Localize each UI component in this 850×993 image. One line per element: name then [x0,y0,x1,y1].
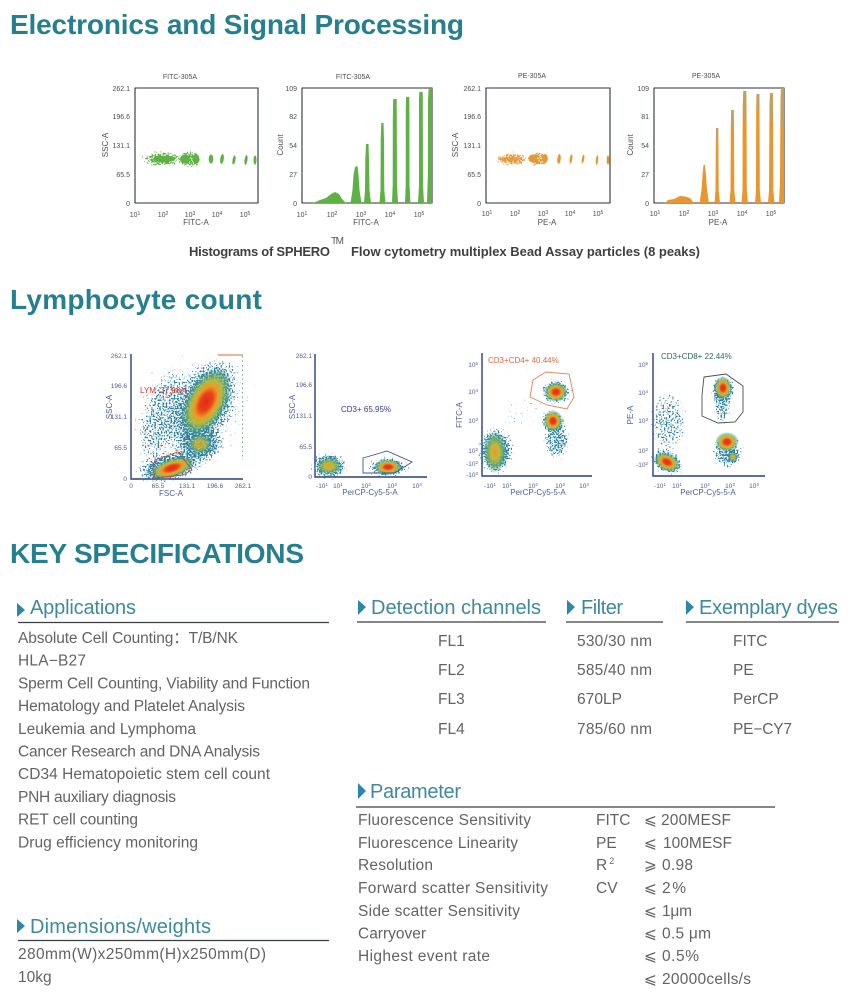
chart: CD3+CD8+ density plot: 1 [679,482,682,487]
chart: CD3+CD8+ density plot: 2 [707,482,710,487]
chart: CD3+CD4+ density plot: 2 [535,482,538,487]
chart: PE count histogram: 10 [679,211,687,218]
chart: PE count histogram: PE-305A [692,73,720,80]
chart: FITC count histogram: 1 [305,211,308,217]
panel: parameter: FITC [596,812,630,829]
chart: CD3+CD4+ density plot: 10 [502,483,509,490]
chart: FSC SSC density plot with LYM gate: 0 [129,483,133,490]
chart: FITC SSC scatter: 196.6 [112,114,130,121]
panel: parameter: 20000cells/s [662,971,751,988]
chart: CD3+CD4+ density plot: 4 [475,388,478,393]
panel: parameter: 0.5 μm [662,926,711,942]
panel: parameter: 200MESF [661,812,731,829]
chart: CD3+CD8+ density plot: -10 [654,483,663,490]
chart: PE SSC scatter: 196.6 [463,114,481,121]
chart: PE count histogram: 5 [774,210,777,216]
panel: parameter: ⩽ [644,948,657,965]
chart: CD3 density plot [288,353,427,497]
chart: PE count histogram: 4 [745,210,748,216]
chart: CD3+CD4+ density plot: 3 [475,417,478,422]
panel: detection channels: FL1 [438,633,465,650]
chart: PE SSC scatter [451,73,610,227]
chart: PE count histogram: Count [626,134,635,156]
chart: PE SSC scatter: 65.5 [467,172,481,179]
panel: exemplary dyes: PerCP [733,691,779,708]
chart: CD3+CD4+ density plot: FITC-A [455,401,464,428]
chart: CD3+CD8+ density plot: PerCP-Cy5-5-A [680,488,736,497]
chart: FSC SSC density plot with LYM gate: 131.1 [111,414,127,421]
caption: histograms: Flow cytometry multiplex Bead Assay particles (8 peaks) [351,244,700,259]
panel: exemplary dyes: Exemplary dyes [699,597,838,619]
panel: parameter: Resolution [358,857,433,874]
panel: dimensions and weights: Dimensions/weights [30,916,211,938]
title: electronics and signal processing: Electronics and Signal Processing [10,9,464,40]
chart: CD3 density plot: 10 [387,483,394,490]
panel: parameter: Carryover [358,926,426,942]
chart: FITC SSC scatter: 3 [193,211,196,217]
chart: FSC SSC density plot with LYM gate: 0 [123,476,127,483]
chart: FITC count histogram: 54 [289,143,297,150]
panel: exemplary dyes: PE−CY7 [733,721,792,738]
chart: PE count histogram: 0 [645,201,649,208]
chart: CD3 density plot: 196.6 [296,382,312,389]
caption: histograms [189,236,700,259]
chart: PE SSC scatter: 2 [518,210,521,216]
chart: FITC count histogram: 82 [289,114,297,121]
panel: parameter [356,781,775,988]
chart: FSC SSC density plot with LYM gate: 262.1 [235,483,252,490]
panel: detection channels: Detection channels [371,597,541,619]
chart: FITC SSC scatter: 5 [248,211,251,217]
chart: FITC SSC scatter: 131.1 [112,143,130,150]
chart: FITC count histogram: 10 [297,212,305,219]
panel: parameter: 2 [609,856,614,866]
panel: applications: Leukemia and Lymphoma [18,721,196,738]
chart: CD3+CD4+ density plot: 10 [528,483,535,490]
chart: CD3+CD4+ density plot: CD3+CD4+ 40.44% [488,356,559,365]
panel: parameter: ⩾ [644,857,657,874]
chart: FITC SSC scatter: 10 [240,212,248,219]
chart: CD3+CD8+ density plot: 4 [645,389,648,394]
chart: CD3+CD8+ density plot: -10 [636,462,645,469]
chart: PE SSC scatter: 10 [482,211,490,218]
chart: PE SSC scatter: 10 [538,211,546,218]
chart: FSC SSC density plot with LYM gate: 196.6 [111,383,127,390]
caption: histograms: TM [331,236,344,247]
panel: parameter: R [596,857,607,874]
panel: parameter: Fluorescence Sensitivity [358,812,531,829]
chart: CD3+CD8+ density plot: 10 [638,390,645,397]
chart: CD3+CD4+ density plot: 10 [468,418,475,425]
chart: FITC SSC scatter: 10 [130,212,138,219]
panel: filter [566,597,663,738]
panel: applications: HLA−B27 [18,653,86,670]
panel: parameter: 100MESF [663,835,732,852]
chart: CD3+CD8+ density plot: 5 [645,361,648,366]
panel: filter: 585/40 nm [577,662,652,679]
chart: CD3+CD8+ density plot: 10 [700,483,707,490]
chart: FITC SSC scatter: 65.5 [116,172,130,179]
panel: applications: Hematology and Platelet Analysis [18,698,245,715]
chart: FITC SSC scatter: 0 [126,201,130,208]
chart: CD3+CD8+ density plot: 10 [638,362,645,369]
panel: detection channels: FL2 [438,662,465,679]
panel: parameter: Parameter [370,781,461,803]
chart: CD3+CD8+ density plot: 10 [672,483,679,490]
panel: applications: Cancer Research and DNA Analysis [18,744,260,760]
chart: CD3 density plot: 0 [308,474,312,481]
panel: filter: 530/30 nm [577,633,652,650]
chart: CD3+CD4+ density plot: -10 [466,461,475,468]
chart: PE SSC scatter: PE-A [538,218,557,227]
chart: PE SSC scatter: SSC-A [451,132,460,157]
chart: PE count histogram: PE-A [709,218,728,227]
panel: parameter: 0.5% [662,948,699,965]
panel: parameter: 2% [662,880,686,897]
chart: PE count histogram: 81 [641,114,649,121]
chart: FSC SSC density plot with LYM gate: 131.1 [179,483,196,490]
panel: applications: Absolute Cell Counting：T/B/NK [18,630,239,647]
chart: PE SSC scatter: 10 [565,211,573,218]
chart: FITC SSC scatter: SSC-A [101,132,110,157]
chart: FSC SSC density plot with LYM gate: 196.6 [207,483,224,490]
chart: FITC SSC scatter: FITC-A [183,218,210,227]
chart: CD3+CD4+ density plot: 10 [468,362,475,369]
chart: FITC count histogram [276,74,432,227]
chart: FITC SSC scatter: 1 [138,211,141,217]
panel: detection channels: FL4 [438,721,465,738]
panel: dimensions and weights: 10kg [18,969,52,986]
chart: FITC count histogram: 27 [289,172,297,179]
panel: filter: Filter [581,597,623,619]
panel: dimensions and weights: 280mm(W)x250mm(H)x250mm(D) [18,946,266,963]
chart: CD3+CD8+ density plot: 10 [749,483,756,490]
chart: FSC SSC density plot with LYM gate: FSC-A [159,489,184,498]
chart: PE count histogram: 3 [716,210,719,216]
title: key specifications: KEY SPECIFICATIONS [10,538,304,569]
chart: CD3+CD8+ density plot: PE-A [626,405,635,424]
chart: FITC SSC scatter: 262.1 [112,86,130,93]
chart: FSC SSC density plot with LYM gate: LYM .37.98% [140,386,187,395]
panel: filter: 785/60 nm [577,721,652,738]
chart: CD3 density plot: SSC-A [288,394,297,419]
chart: FSC SSC density plot with LYM gate: SSC-A [105,394,114,419]
chart: PE SSC scatter: 3 [546,210,549,216]
chart: FITC count histogram: 5 [422,211,425,217]
chart: FITC count histogram: 4 [393,211,396,217]
chart: CD3 density plot: 1 [340,482,343,487]
chart: CD3 density plot: -10 [316,483,325,490]
panel: parameter: Forward scatter Sensitivity [358,880,548,897]
panel: applications: PNH auxiliary diagnosis [18,789,176,806]
chart: CD3+CD4+ density plot: 2 [475,447,478,452]
chart: FITC SSC scatter: 10 [158,212,166,219]
chart: FITC count histogram: Count [276,134,285,156]
chart: PE SSC scatter: 4 [573,210,576,216]
chart: PE count histogram: 1 [658,210,661,216]
chart: PE count histogram: 54 [641,143,649,150]
chart: PE SSC scatter: 0 [477,201,481,208]
chart: CD3+CD4+ density plot: 3 [475,471,478,476]
chart: CD3+CD4+ density plot: 10 [555,483,562,490]
chart: CD3 density plot: 1 [325,482,328,487]
panel: parameter: Highest event rate [358,948,490,965]
chart: FITC SSC scatter: 4 [220,211,223,217]
chart: CD3+CD8+ density plot: 3 [732,482,735,487]
chart: CD3 density plot: 3 [394,482,397,487]
panel: dimensions and weights [17,916,329,986]
chart: FITC SSC scatter: 2 [166,211,169,217]
chart: FITC count histogram: 2 [335,211,338,217]
chart: CD3 density plot: CD3+ 65.95% [341,405,391,414]
panel: parameter: PE [596,835,617,852]
chart: FITC SSC scatter: 10 [212,212,220,219]
chart: PE SSC scatter: 10 [510,211,518,218]
chart: CD3+CD4+ density plot: PerCP-Cy5-5-A [510,488,566,497]
chart: CD3+CD4+ density plot: 10 [468,389,475,396]
chart: CD3+CD4+ density plot [455,353,592,497]
chart: PE SSC scatter: 5 [601,210,604,216]
chart: CD3 density plot: PerCP-Cy5-5-A [342,488,398,497]
chart: FITC count histogram: 109 [285,86,297,93]
panel: applications: CD34 Hematopoietic stem cell count [18,766,271,783]
panel: parameter: ⩽ [644,903,657,920]
panel: parameter: Side scatter Sensitivity [358,903,520,920]
panel: applications [17,597,329,851]
panel: parameter: Fluorescence Linearity [358,835,518,852]
chart: CD3+CD8+ density plot: 4 [756,482,759,487]
chart: CD3+CD8+ density plot: CD3+CD8+ 22.44% [661,352,732,361]
chart: CD3 density plot: 10 [412,483,419,490]
panel: applications: Applications [30,597,136,619]
chart: CD3+CD8+ density plot [626,352,765,497]
chart: PE count histogram: 10 [737,211,745,218]
chart: PE count histogram: 2 [687,210,690,216]
chart: PE count histogram: 10 [650,211,658,218]
chart: CD3+CD4+ density plot: 10 [468,448,475,455]
chart: PE SSC scatter: 262.1 [463,86,481,93]
chart: PE SSC scatter: PE-305A [518,73,546,80]
chart: PE count histogram: 27 [641,172,649,179]
chart: CD3+CD8+ density plot: 1 [663,482,666,487]
chart: FITC count histogram: FITC-A [353,218,380,227]
chart: PE count histogram: 10 [708,211,716,218]
panel: parameter: ⩽ [644,880,657,897]
chart: FSC SSC density plot with LYM gate [105,337,260,498]
chart: PE count histogram: 109 [637,86,649,93]
panel: parameter: ⩽ [644,926,657,942]
panel: parameter: ⩽ [644,971,657,988]
chart: PE SSC scatter: 1 [490,210,493,216]
chart: CD3+CD4+ density plot: 2 [475,460,478,465]
chart: CD3+CD4+ density plot: -10 [484,483,493,490]
chart: CD3+CD8+ density plot: 3 [645,417,648,422]
panel: detection channels: FL3 [438,691,465,708]
chart: FITC count histogram: 10 [356,212,364,219]
chart: FITC count histogram: 10 [327,212,335,219]
chart: CD3+CD4+ density plot: 5 [475,361,478,366]
chart: CD3+CD4+ density plot: 1 [509,482,512,487]
panel: applications: RET cell counting [18,812,138,829]
title: lymphocyte count: Lymphocyte count [10,284,262,315]
panel: detection channels [357,597,546,738]
chart: PE count histogram: 10 [766,211,774,218]
panel: parameter: 0.98 [662,857,693,874]
chart: CD3+CD4+ density plot: 10 [579,483,586,490]
caption: histograms: Histograms of SPHERO [189,244,330,259]
chart: CD3 density plot: 10 [361,483,368,490]
chart: FITC count histogram: 3 [364,211,367,217]
chart: CD3+CD8+ density plot: 10 [725,483,732,490]
chart: PE count histogram [626,73,784,227]
panel: parameter: ⩽ [644,835,657,852]
panel: parameter: ⩽ [644,812,657,829]
panel: exemplary dyes: FITC [733,633,767,650]
chart: CD3 density plot: 4 [419,482,422,487]
chart: CD3 density plot: 65.5 [299,444,312,451]
chart: FSC SSC density plot with LYM gate: 262.1 [111,353,127,360]
chart: CD3 density plot: 2 [368,482,371,487]
panel: parameter: CV [596,880,618,897]
chart: CD3 density plot: 131.1 [296,413,312,420]
chart: CD3+CD8+ density plot: 2 [645,447,648,452]
chart: CD3+CD4+ density plot: 1 [493,482,496,487]
chart: CD3+CD8+ density plot: 10 [638,448,645,455]
chart: CD3+CD8+ density plot: 10 [638,418,645,425]
chart: FITC count histogram: 0 [293,201,297,208]
panel: exemplary dyes: PE [733,662,754,679]
chart: FITC count histogram: FITC-305A [336,74,370,81]
panel: parameter: 1μm [662,903,692,920]
chart: FITC SSC scatter: 10 [185,212,193,219]
chart: CD3 density plot: 262.1 [296,353,312,360]
chart: CD3+CD4+ density plot: 4 [586,482,589,487]
panel: exemplary dyes [686,597,839,738]
chart: CD3+CD8+ density plot: 2 [645,461,648,466]
chart: CD3+CD4+ density plot: 3 [562,482,565,487]
chart: FSC SSC density plot with LYM gate: 65.5 [114,445,127,452]
chart: FITC SSC scatter: FITC-305A [163,74,197,81]
chart: FSC SSC density plot with LYM gate: 65.5 [152,483,165,490]
chart: CD3+CD4+ density plot: -10 [466,472,475,479]
chart: PE SSC scatter: 131.1 [463,143,481,150]
chart: FITC count histogram: 10 [414,212,422,219]
chart: FITC count histogram: 10 [385,212,393,219]
chart: FITC SSC scatter [101,74,258,227]
panel: applications: Drug efficiency monitoring [18,834,198,851]
chart: CD3 density plot: 10 [333,483,340,490]
chart: PE SSC scatter: 10 [593,211,601,218]
panel: applications: Sperm Cell Counting, Viability and Function [18,675,310,692]
panel: filter: 670LP [577,691,622,708]
